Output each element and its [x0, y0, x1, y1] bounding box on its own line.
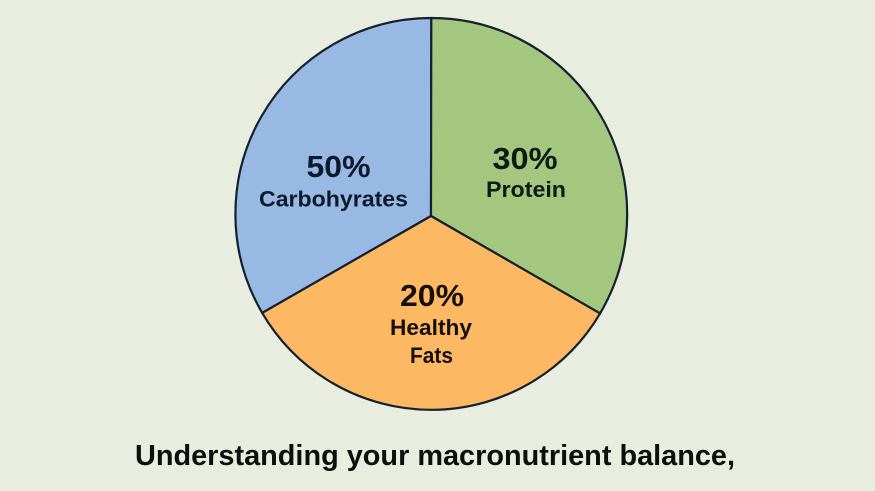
pie chart [235, 18, 627, 410]
label: 20% healthy fats [390, 278, 473, 368]
slice: healthy fats [262, 216, 600, 410]
slice: protein [431, 18, 627, 313]
label: 50% carbohydrates: Carbohyrates [259, 186, 408, 212]
caption: Understanding your macronutrient balance, [135, 440, 735, 472]
label: 30% protein: Protein [486, 177, 566, 202]
label: 20% healthy fats: Healthy [390, 315, 473, 340]
slice: carbohydrates [235, 18, 431, 313]
label: 20% healthy fats: 20% [400, 278, 464, 313]
label: 20% healthy fats: Fats [410, 343, 453, 368]
label: 30% protein: 30% [492, 141, 558, 176]
label: 50% carbohydrates: 50% [306, 149, 370, 184]
label: 30% protein [486, 141, 566, 202]
label: 50% carbohydrates [259, 149, 408, 212]
